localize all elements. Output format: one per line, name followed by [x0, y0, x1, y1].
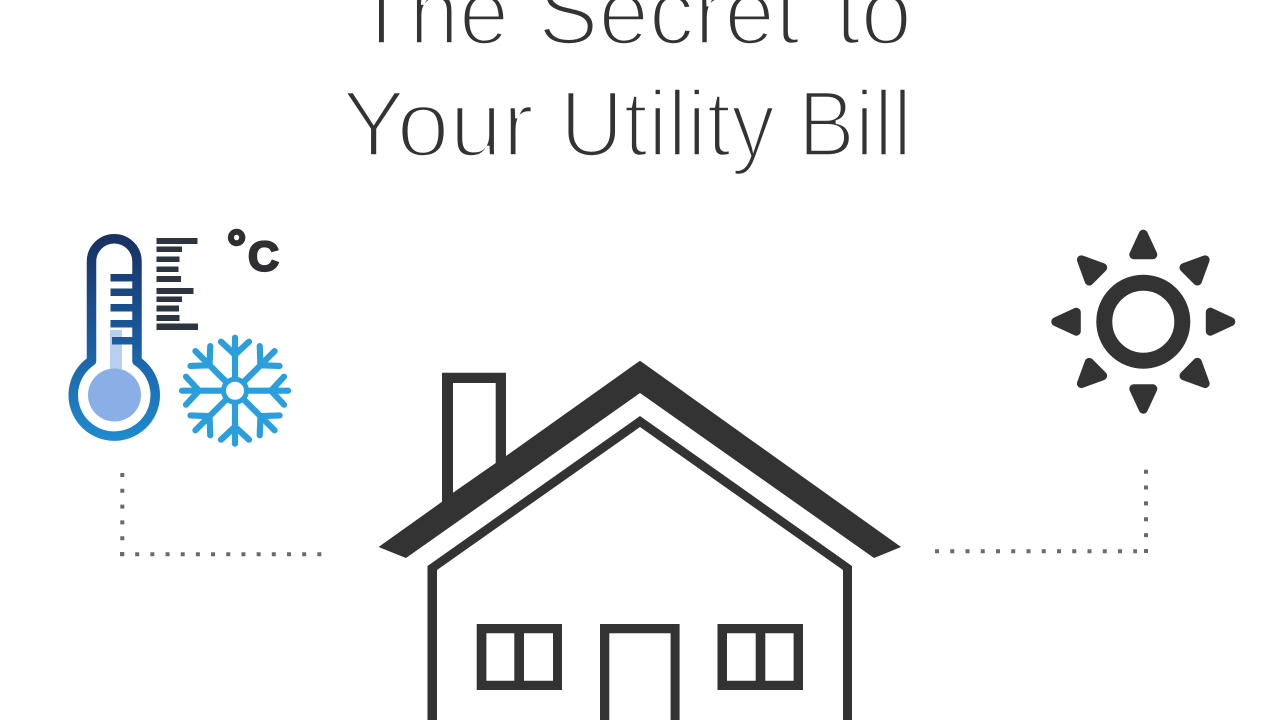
house walls [428, 416, 852, 720]
dotted connector: right [935, 470, 1146, 553]
thermometer stem liquid [110, 330, 122, 380]
door [600, 624, 680, 720]
degrees celsius symbol [227, 222, 279, 280]
thermometer outline [73, 239, 155, 436]
icon: snowflake [182, 338, 288, 444]
icon: sun [1056, 234, 1231, 409]
dotted connector: left [120, 473, 322, 556]
title [342, 0, 912, 176]
title line 1 [354, 0, 912, 64]
title line 2: Utility [560, 71, 775, 176]
icon: thermometer [73, 239, 155, 436]
roof and chimney [379, 361, 901, 558]
sun rays [1056, 234, 1231, 409]
left window [477, 624, 562, 690]
thermometer ticks [110, 274, 132, 344]
title line 2 [342, 71, 912, 176]
thermometer bulb [88, 368, 141, 422]
icon: house [379, 361, 901, 720]
sun ring [1104, 283, 1182, 361]
right window [718, 624, 803, 690]
title line 2: Your [342, 71, 534, 176]
title line 2: Bill [798, 71, 912, 176]
degrees celsius symbol: C [248, 232, 279, 280]
icon: temperature scale [156, 238, 198, 330]
degrees celsius symbol: ° [227, 222, 246, 275]
